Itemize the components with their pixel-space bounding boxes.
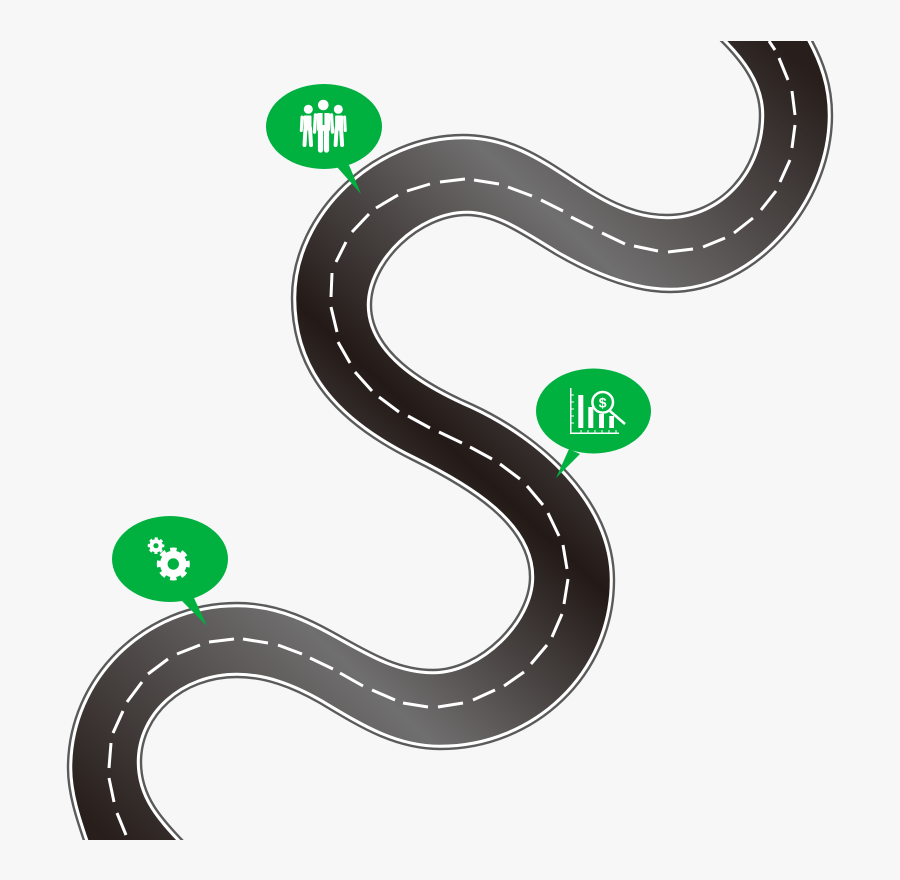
icon: team of people bbox=[301, 100, 345, 150]
speech bubble: team bbox=[266, 84, 382, 194]
speech bubble: gears bbox=[112, 516, 228, 626]
road surface bbox=[68, 30, 832, 854]
road centre dashes bbox=[109, 41, 795, 835]
speech bubble: finance chart bbox=[536, 368, 651, 478]
icon: gears bbox=[149, 539, 187, 578]
winding road bbox=[68, 30, 832, 854]
icon: bar chart with magnifier: $ bbox=[599, 394, 607, 410]
